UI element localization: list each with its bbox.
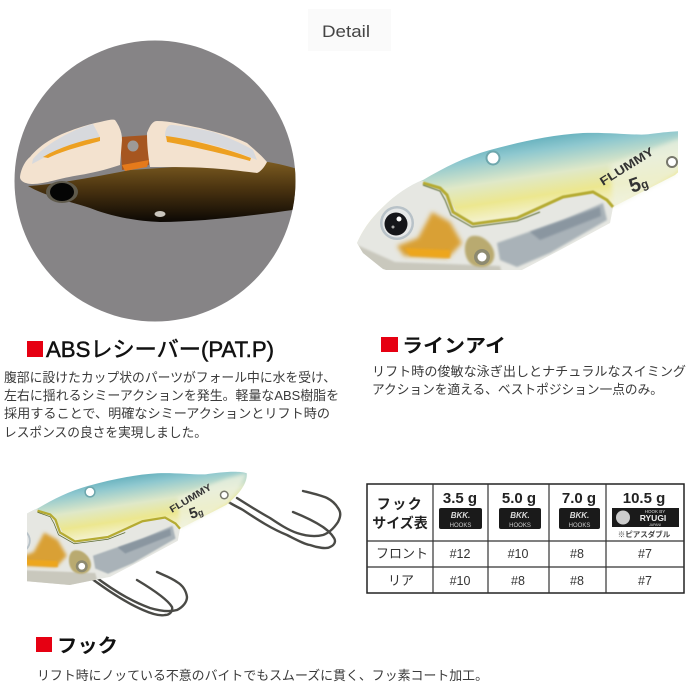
red square bullet bbox=[27, 341, 43, 357]
weight column headers: 7.0 g bbox=[562, 490, 596, 507]
lure eye bbox=[46, 181, 78, 203]
rear row: #7 bbox=[638, 574, 652, 588]
section heading: ABSレシーバー(PAT.P) bbox=[46, 337, 274, 362]
body text: リフト時にノッている不意のバイトでもスムーズに貫く、フッ素コート加工。 bbox=[37, 668, 488, 683]
circular photo: ABS receiver closeup bbox=[14, 40, 300, 322]
right cup window bbox=[165, 125, 257, 160]
body text: アクションを適える、ベストポジション一点のみ。 bbox=[372, 382, 663, 397]
dark lure body bbox=[28, 162, 300, 222]
weight column headers: 3.5 g bbox=[443, 490, 477, 507]
Ryugi hook badge bbox=[612, 508, 679, 527]
right clear cup bbox=[147, 121, 267, 173]
left cup orange stripe bbox=[43, 137, 100, 158]
section heading: フック bbox=[57, 635, 118, 657]
right cup orange stripe bbox=[166, 136, 251, 161]
body text: 腹部に設けたカップ状のパーツがフォール中に水を受け、 bbox=[4, 370, 336, 385]
section heading: ラインアイ bbox=[402, 336, 506, 357]
section: line eye bbox=[372, 336, 686, 397]
table row header bbox=[372, 496, 428, 531]
section: ABS receiver bbox=[4, 337, 339, 440]
lure body hole bbox=[154, 211, 166, 217]
rear row bbox=[388, 573, 652, 588]
rear row: #10 bbox=[450, 574, 470, 588]
lure model text: FLUMMY bbox=[597, 144, 656, 189]
weight column headers: 10.5 g bbox=[623, 490, 665, 507]
detail heading tab bbox=[308, 9, 391, 51]
pierce double note: ※ピアスダブル bbox=[618, 529, 671, 539]
table row header: フック bbox=[377, 496, 423, 512]
left cup window bbox=[32, 124, 100, 164]
weight column headers: 5.0 g bbox=[502, 490, 536, 507]
body text bbox=[4, 370, 339, 440]
body text: リフト時の俊敏な泳ぎ出しとナチュラルなスイミング bbox=[372, 364, 686, 379]
left clear cup bbox=[20, 120, 122, 184]
BKK hooks badge 7.0g bbox=[559, 508, 600, 529]
front row: フロント bbox=[376, 546, 428, 561]
front row bbox=[376, 546, 652, 561]
BKK hooks badge 5.0g: HOOKS bbox=[509, 523, 531, 529]
detail heading tab: Detail bbox=[322, 22, 370, 41]
body text: 採用することで、明確なシミーアクションとリフト時の bbox=[4, 406, 330, 421]
Ryugi hook badge: JAPANI bbox=[649, 523, 661, 527]
rear row: #8 bbox=[570, 574, 584, 588]
BKK hooks badge 7.0g: BKK. bbox=[570, 511, 589, 520]
lure weight text: 5g bbox=[626, 171, 651, 198]
rear row: #8 bbox=[511, 574, 525, 588]
BKK hooks badge 7.0g: HOOKS bbox=[569, 523, 590, 529]
BKK hooks badge 5.0g bbox=[499, 508, 541, 529]
lure closeup: line eye bbox=[357, 131, 678, 270]
front row: #12 bbox=[450, 547, 470, 561]
BKK hooks badge 3.5g bbox=[439, 508, 482, 529]
front treble hook bbox=[80, 570, 187, 615]
body text bbox=[372, 364, 686, 397]
weight column headers bbox=[443, 490, 665, 507]
lure model text: FLUMMY bbox=[168, 482, 214, 516]
front row: #7 bbox=[638, 547, 652, 561]
rear row: リア bbox=[388, 573, 414, 588]
front row: #8 bbox=[570, 547, 584, 561]
body text: 左右に揺れるシミーアクションを発生。軽量なABS樹脂を bbox=[4, 388, 339, 403]
BKK hooks badge 5.0g: BKK. bbox=[510, 511, 530, 520]
BKK hooks badge 3.5g: HOOKS bbox=[450, 523, 471, 529]
front row: #10 bbox=[508, 547, 528, 561]
central line eye tab bbox=[120, 135, 150, 170]
section: hook bbox=[36, 635, 488, 683]
lure closeup with hooks bbox=[0, 472, 340, 615]
rear treble hook bbox=[223, 491, 340, 548]
body text: レスポンスの良さを実現しました。 bbox=[4, 425, 207, 440]
lure weight text: 5g bbox=[187, 502, 205, 523]
red square bullet bbox=[381, 337, 398, 352]
hook size table bbox=[367, 484, 684, 593]
Ryugi hook badge: HOOK BY bbox=[645, 509, 665, 514]
BKK hooks badge 3.5g: BKK. bbox=[451, 511, 470, 520]
table row header: サイズ表 bbox=[372, 515, 428, 531]
Ryugi hook badge: RYUGI bbox=[640, 513, 666, 523]
red square bullet bbox=[36, 637, 52, 652]
